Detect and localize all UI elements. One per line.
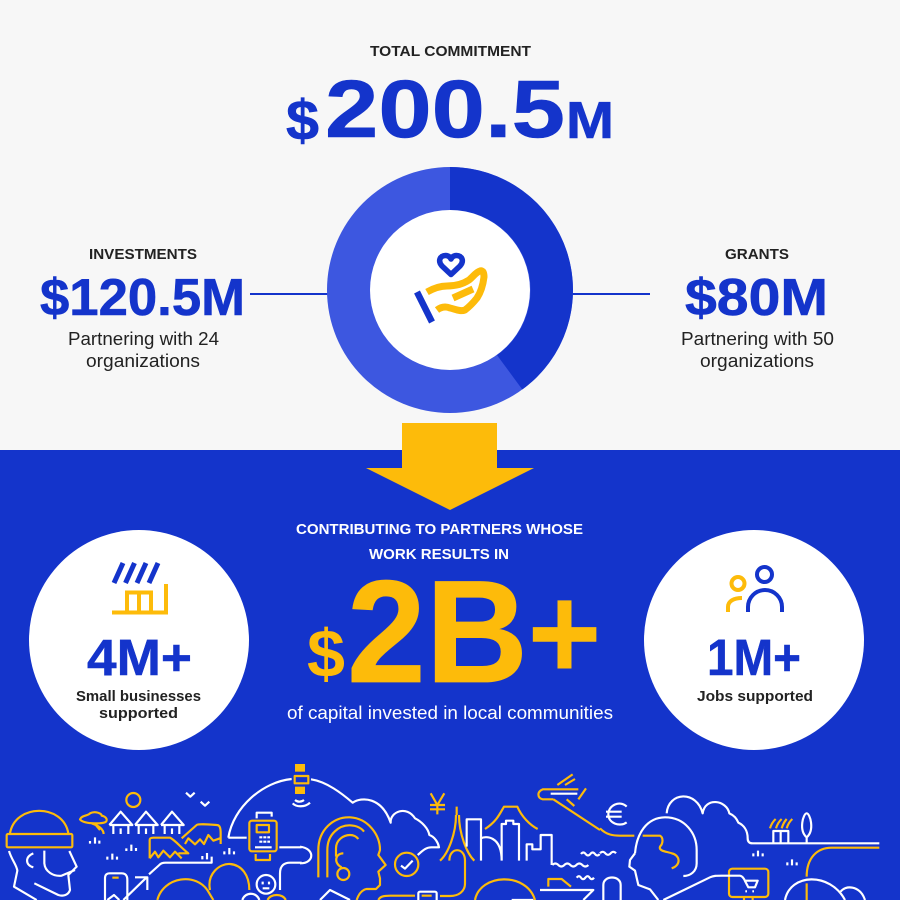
airplane xyxy=(538,774,600,830)
total amount: 200.5 xyxy=(325,64,565,155)
huts xyxy=(109,812,184,834)
investments block: $120.5M xyxy=(40,269,245,327)
cloud to ground line xyxy=(667,796,879,843)
icon: storefront xyxy=(112,563,166,612)
total amount: $ xyxy=(286,89,319,153)
waves and arch xyxy=(600,852,621,900)
sun xyxy=(126,793,140,807)
tree xyxy=(802,813,811,843)
illustration: global community line art, middle section xyxy=(300,774,600,900)
phone and growth arrow xyxy=(105,873,147,900)
heading: total commitment: TOTAL COMMITMENT xyxy=(370,44,531,60)
cattle xyxy=(150,824,221,858)
tokyo tower xyxy=(378,807,474,900)
stat: 1M+: 1M+ xyxy=(707,629,801,686)
total amount xyxy=(286,64,614,155)
ship xyxy=(475,879,593,900)
waves xyxy=(552,852,600,879)
investments block: Partnering with 24 xyxy=(68,329,219,349)
globe and bush xyxy=(785,879,865,900)
check badge xyxy=(395,853,418,876)
text: capital invested: of capital invested in local communities xyxy=(287,703,613,723)
heading: contributing: WORK RESULTS IN xyxy=(369,547,509,563)
shopping cart sign xyxy=(663,869,768,900)
skyline xyxy=(467,819,552,865)
arrow: down xyxy=(366,423,534,510)
label: small businesses supported: supported xyxy=(99,706,178,722)
satellite xyxy=(293,764,310,806)
stat: 2B+: $ xyxy=(307,616,345,692)
yellow arcs xyxy=(157,864,286,900)
investments block xyxy=(40,247,245,371)
cloud outline xyxy=(311,779,439,855)
investments block: INVESTMENTS xyxy=(89,247,197,263)
grants block: organizations xyxy=(700,351,814,371)
panel: jobs supported xyxy=(644,530,864,750)
label: jobs supported: Jobs supported xyxy=(697,689,813,705)
stat: 4M+: 4M+ xyxy=(87,629,192,686)
illustration: global community line art, right section xyxy=(600,796,879,900)
grants block xyxy=(681,247,834,371)
mountain xyxy=(485,807,538,829)
icon: people xyxy=(728,567,782,612)
yen sign xyxy=(430,793,445,814)
stat: 2B+: + xyxy=(528,559,602,708)
stat: 2B+: 2B xyxy=(347,550,528,713)
flight path into brain xyxy=(600,828,679,868)
euro sign xyxy=(606,804,627,825)
grass tufts xyxy=(753,851,797,865)
smiley faces xyxy=(242,875,275,900)
acacia tree xyxy=(80,812,107,834)
road xyxy=(807,848,879,900)
illustration: global community line art, left section xyxy=(7,764,310,900)
label: small businesses supported xyxy=(76,689,201,722)
panel: small businesses xyxy=(29,530,249,750)
grants block: Partnering with 50 xyxy=(681,329,834,349)
grass tufts xyxy=(90,837,234,860)
grants block: $80M xyxy=(685,269,828,327)
stat: 2B+ xyxy=(307,550,602,713)
panel: commitment background xyxy=(0,0,900,450)
grants block: GRANTS xyxy=(725,247,789,263)
head profile xyxy=(300,817,386,900)
panel: impact background xyxy=(0,450,900,900)
icon: hand holding heart xyxy=(417,256,484,322)
investments block: organizations xyxy=(86,351,200,371)
head with beanie xyxy=(7,811,77,900)
white shelf xyxy=(149,857,212,874)
factory xyxy=(770,819,792,843)
connector lines xyxy=(250,293,650,295)
heading: contributing: CONTRIBUTING TO PARTNERS WHOSE xyxy=(296,522,583,538)
label: small businesses supported: Small businesses xyxy=(76,689,201,705)
payment watch xyxy=(249,813,277,860)
total amount: M xyxy=(566,92,614,150)
birds xyxy=(186,793,209,806)
dome and connecting paths xyxy=(228,779,302,890)
donut chart xyxy=(327,167,573,413)
head xyxy=(629,817,697,900)
heading: contributing xyxy=(296,522,583,563)
